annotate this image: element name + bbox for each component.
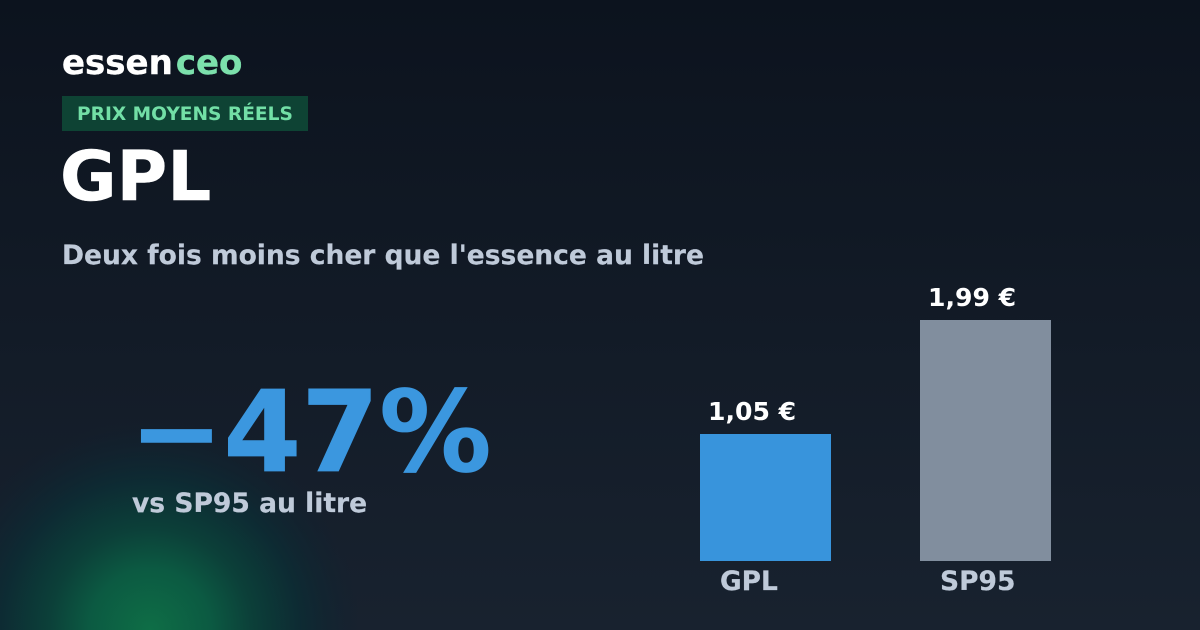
- green glow: [0, 420, 360, 630]
- big stat: −47%: [130, 368, 491, 498]
- bar: SP95: SP95: [940, 566, 1015, 597]
- badge: PRIX MOYENS RÉELS: [77, 102, 293, 125]
- title: GPL: [60, 137, 211, 217]
- badge: [62, 96, 308, 131]
- bar: GPL: GPL: [720, 566, 778, 597]
- bar: SP95: 1,99 €: [928, 283, 1016, 312]
- bar: GPL: 1,05 €: [708, 397, 796, 426]
- bar: SP95: [920, 283, 1051, 597]
- subtitle: Deux fois moins cher que l'essence au litre: [62, 240, 704, 271]
- brand logo: essenceo: [62, 43, 242, 83]
- stat caption: vs SP95 au litre: [132, 488, 367, 519]
- bar: GPL: [700, 397, 831, 597]
- bar chart: [700, 283, 1051, 597]
